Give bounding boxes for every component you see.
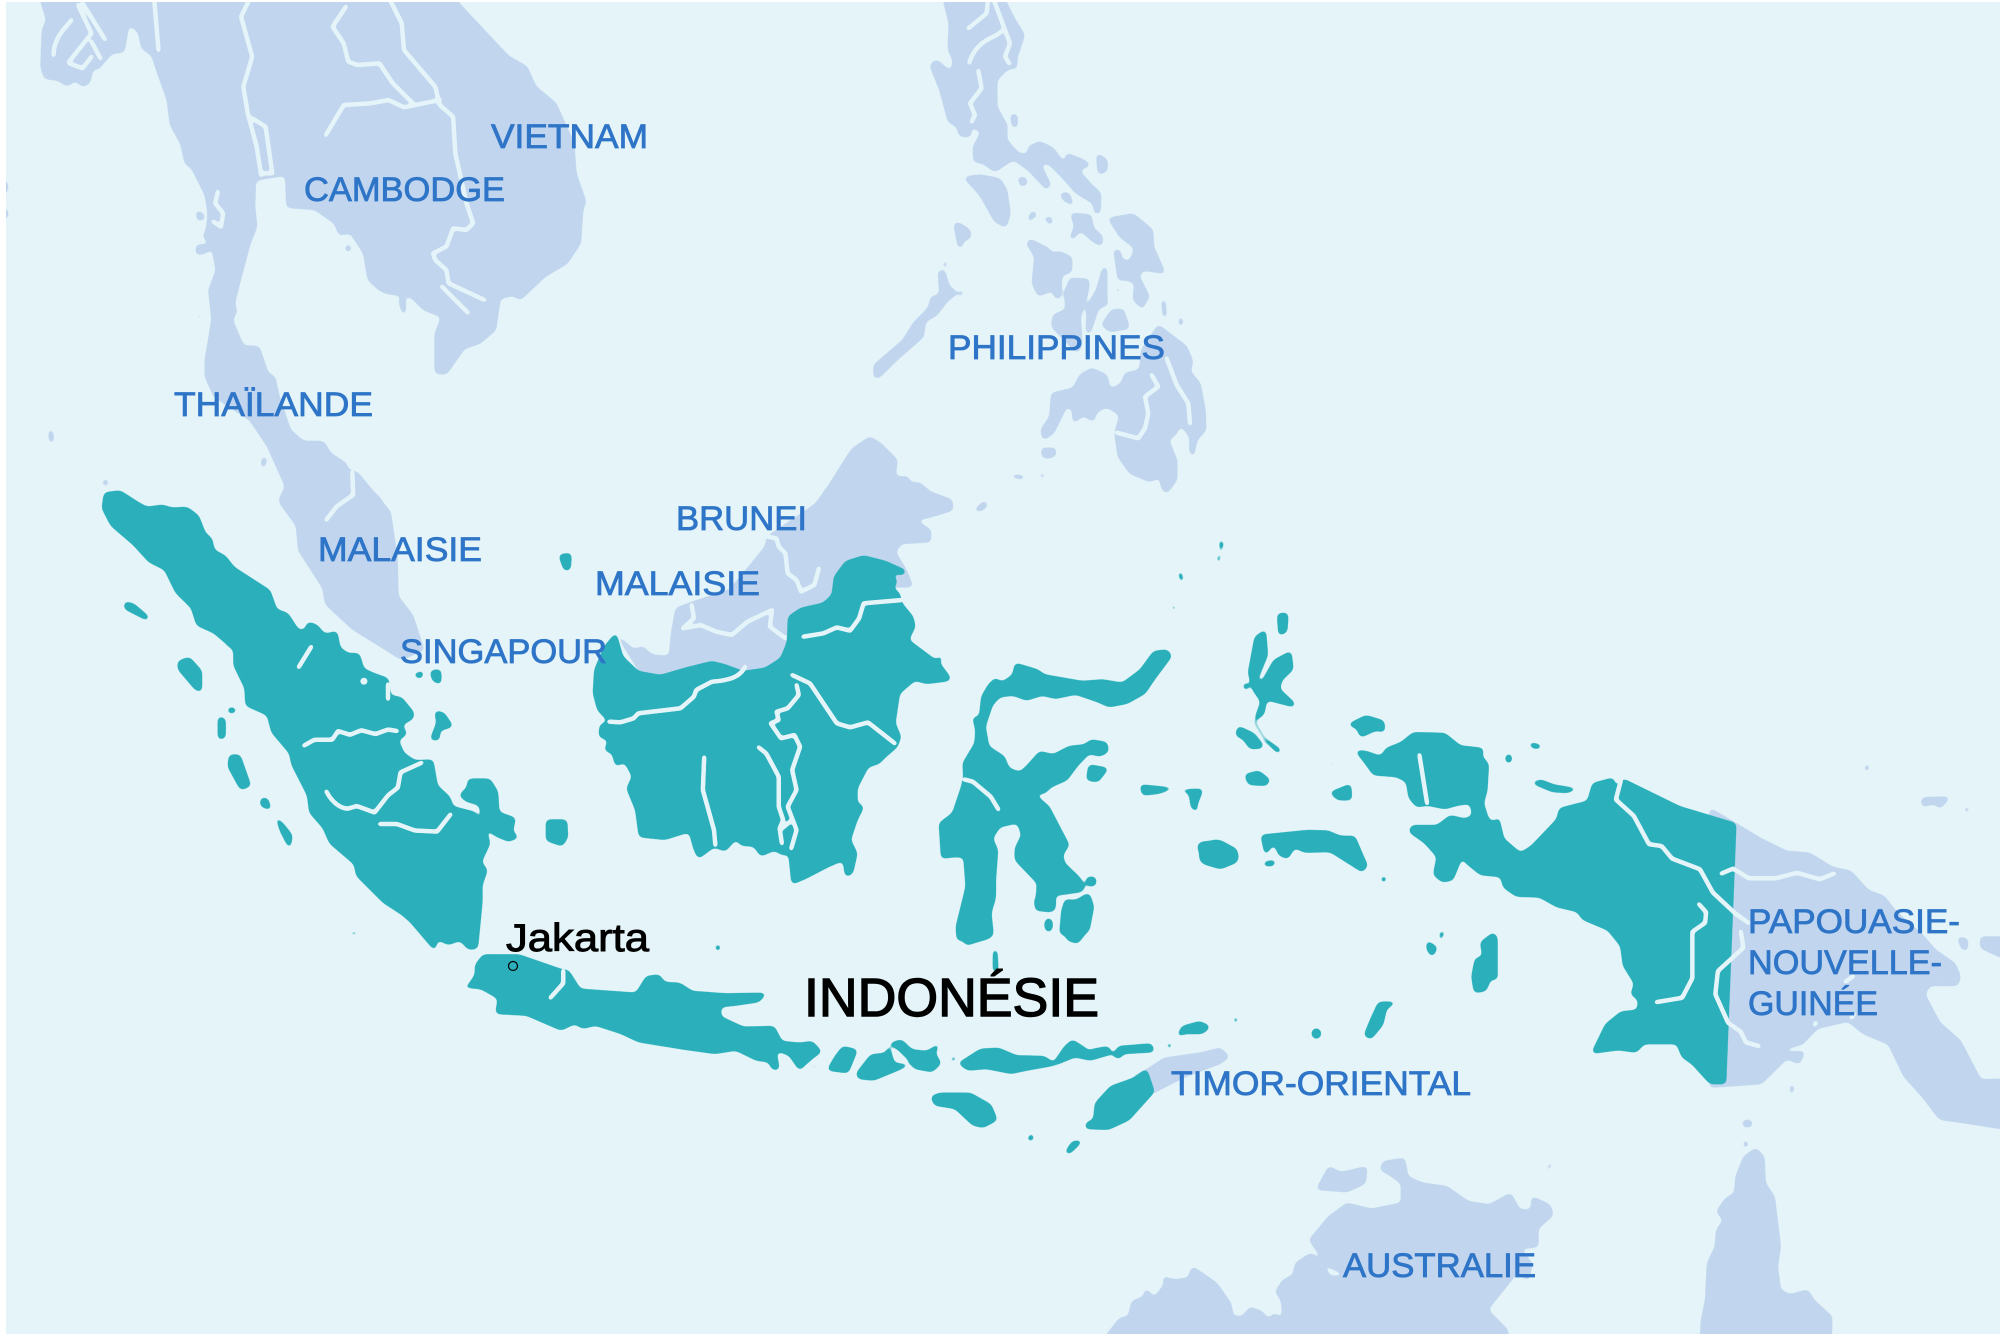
label: papouasie-nouvelle-guinée: GUINÉE [1748,985,1878,1023]
indonesia: maluku and papua [1200,592,1736,1084]
land: timor-leste [1134,1048,1229,1100]
label: cambodge: CAMBODGE [304,171,505,209]
title: indonésie: INDONÉSIE [804,968,1099,1028]
land: malaysia and brunei on borneo [616,437,953,687]
rivers of new guinea [1419,755,1834,1046]
land: australia [1086,1120,1832,1334]
label: philippines: PHILIPPINES [948,329,1165,367]
label: brunei: BRUNEI [676,500,807,538]
label: malaisie borneo: MALAISIE [595,565,760,603]
label: papouasie-nouvelle-guinée [1748,903,1960,1023]
river of the peninsula [326,472,353,520]
capital marker: jakarta [508,962,518,970]
islands around sulawesi [1049,538,1239,940]
papua [1356,733,1736,1084]
lesser sunda islands [828,1040,958,1080]
rivers of papua new guinea [1815,976,1854,1025]
river of java [551,971,563,998]
label: singapour: SINGAPOUR [400,633,607,671]
rivers of the philippines [968,0,1190,438]
maluku islands [1278,613,1288,635]
land: mainland southeast asia [2,0,586,500]
label: australie: AUSTRALIE [1343,1247,1536,1285]
rivers on neighbouring countries [54,0,1854,1025]
indonesia: java and lesser sunda islands [456,900,1238,1153]
label: timor-oriental: TIMOR-ORIENTAL [1171,1065,1471,1103]
label: vietnam: VIETNAM [491,118,648,156]
land: papua new guinea [1710,764,2000,1135]
indonesia land layer [102,491,1736,1153]
rivers of northern borneo [683,537,819,638]
label: malaisie peninsula: MALAISIE [318,531,482,569]
land: malay peninsula [102,470,424,659]
java [456,955,821,1070]
indonesia: sumatra and nearby islands [102,491,603,981]
rivers of kalimantan and sulawesi [609,600,998,848]
rivers of sumatra [299,647,451,832]
rivers of the mainland [54,0,484,313]
label: thaïlande: THAÏLANDE [174,386,373,424]
land: philippines [874,0,1206,512]
sulawesi [939,650,1172,940]
label: papouasie-nouvelle-guinée: NOUVELLE- [1748,944,1942,982]
label: papouasie-nouvelle-guinée: PAPOUASIE- [1748,903,1960,941]
kalimantan [593,556,951,884]
south tips of sulawesi [957,900,1092,945]
indonesia: kalimantan and sulawesi [593,538,1239,940]
label: jakarta: Jakarta [506,917,649,960]
rivers on indonesia [299,600,1834,1046]
